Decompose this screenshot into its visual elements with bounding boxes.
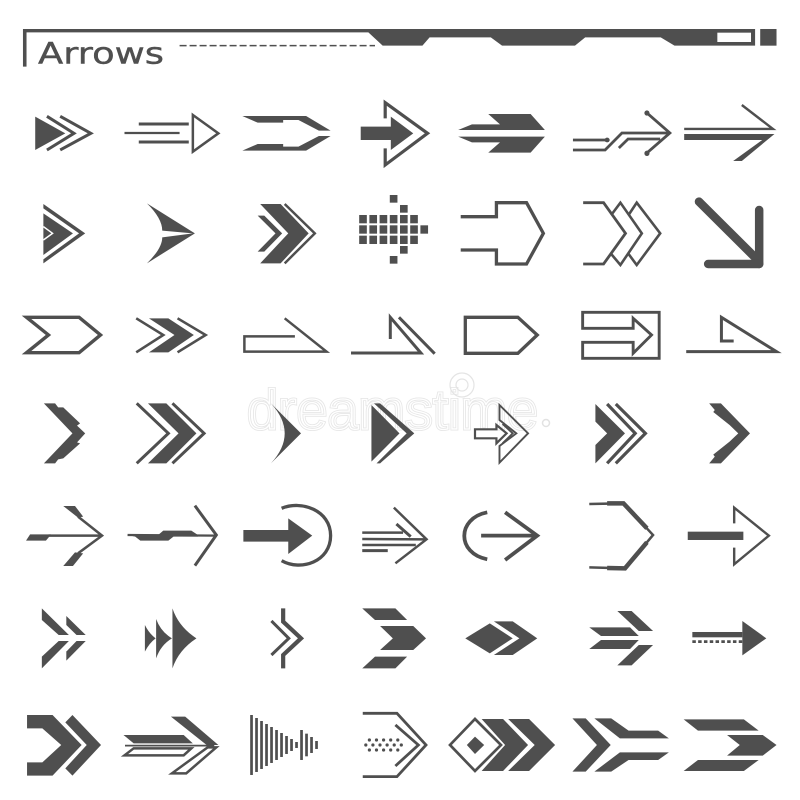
icon: solid arrow with arc <box>243 505 331 565</box>
icon: striped triangle arrow <box>252 715 317 775</box>
header frame <box>23 29 777 67</box>
icon: vertical line with bump <box>271 608 301 668</box>
title: Arrows <box>38 36 164 70</box>
icon: open tech chevron <box>589 503 653 568</box>
icon: outline chevron band <box>27 317 101 353</box>
icon: pixel grid arrow <box>359 195 428 264</box>
icon: bar with outline head <box>688 508 769 564</box>
icon: three growing darts <box>145 608 196 668</box>
icon: dotted shaft in chevrons <box>363 713 426 777</box>
icon: diamond and chevron <box>465 621 537 655</box>
icon: chevron with forked tail <box>572 718 669 772</box>
icon: split double chevrons <box>42 608 86 668</box>
icon: large chevrons thin thick thin <box>137 403 204 463</box>
watermark: dreamstime <box>247 378 538 441</box>
icon: outline arrow in chevrons <box>475 405 528 463</box>
row 1 of arrows <box>35 103 774 165</box>
icon: long arrow with angled head <box>684 105 774 161</box>
icon: notched arrow with two chevrons <box>595 404 645 463</box>
icon: tech shaft arrow <box>26 506 102 566</box>
icon: circuit arrow <box>573 110 670 156</box>
row 5 of arrows <box>26 503 769 568</box>
icon: angled line wedge <box>351 317 435 354</box>
icon: four piece arrow <box>589 611 653 665</box>
icon: triple weight chevrons <box>258 204 315 263</box>
icon: dashed shaft arrow <box>692 621 766 655</box>
icon: curved dart arrow <box>147 203 195 263</box>
icon: split block arrow <box>458 114 545 153</box>
icon: open outline wedge <box>244 318 327 352</box>
row 3 of arrows <box>27 312 777 358</box>
icon: layered triangle chevron <box>43 204 85 263</box>
icon: solid arrow in chevron <box>361 103 428 165</box>
icon: circuit shaft arrow <box>128 506 217 566</box>
icon: split bracket arrow <box>242 116 331 151</box>
icon: outlined house arrow <box>461 203 543 264</box>
icon: thick diagonal arrow <box>699 202 759 264</box>
icon: boxed outline arrow <box>583 312 659 358</box>
icon: stepped chevron small <box>709 403 750 463</box>
icon: chevrons thin thick thin <box>136 318 206 352</box>
icon: triangle with strip chevron <box>371 403 414 463</box>
icon: block arrow with bars <box>362 608 426 668</box>
icon: three block arrow <box>684 719 777 771</box>
row 7 of arrows <box>27 713 777 777</box>
icon: speed lines with outline triangle <box>124 115 218 152</box>
watermark: dreamstime <box>247 378 538 441</box>
icon: line wedge with hook <box>686 317 777 352</box>
row 4 of arrows <box>44 403 750 463</box>
icon: nested diamond with chevrons <box>450 719 555 771</box>
icon: multi line arrow <box>362 508 427 563</box>
icon: heavy bracket chevron <box>27 715 101 776</box>
row 2 of arrows <box>43 195 759 265</box>
icon: curved blade arrow <box>271 403 301 463</box>
icon: triangle with double chevrons <box>35 116 91 150</box>
icon: bracket and arrow <box>464 512 537 560</box>
row 6 of arrows <box>42 608 766 668</box>
icon: outlined tag <box>465 317 537 353</box>
icon: linked outline chevrons <box>583 203 660 265</box>
icon: stepped chevron <box>44 403 85 463</box>
icon: solid and outline split arrow <box>123 717 218 773</box>
